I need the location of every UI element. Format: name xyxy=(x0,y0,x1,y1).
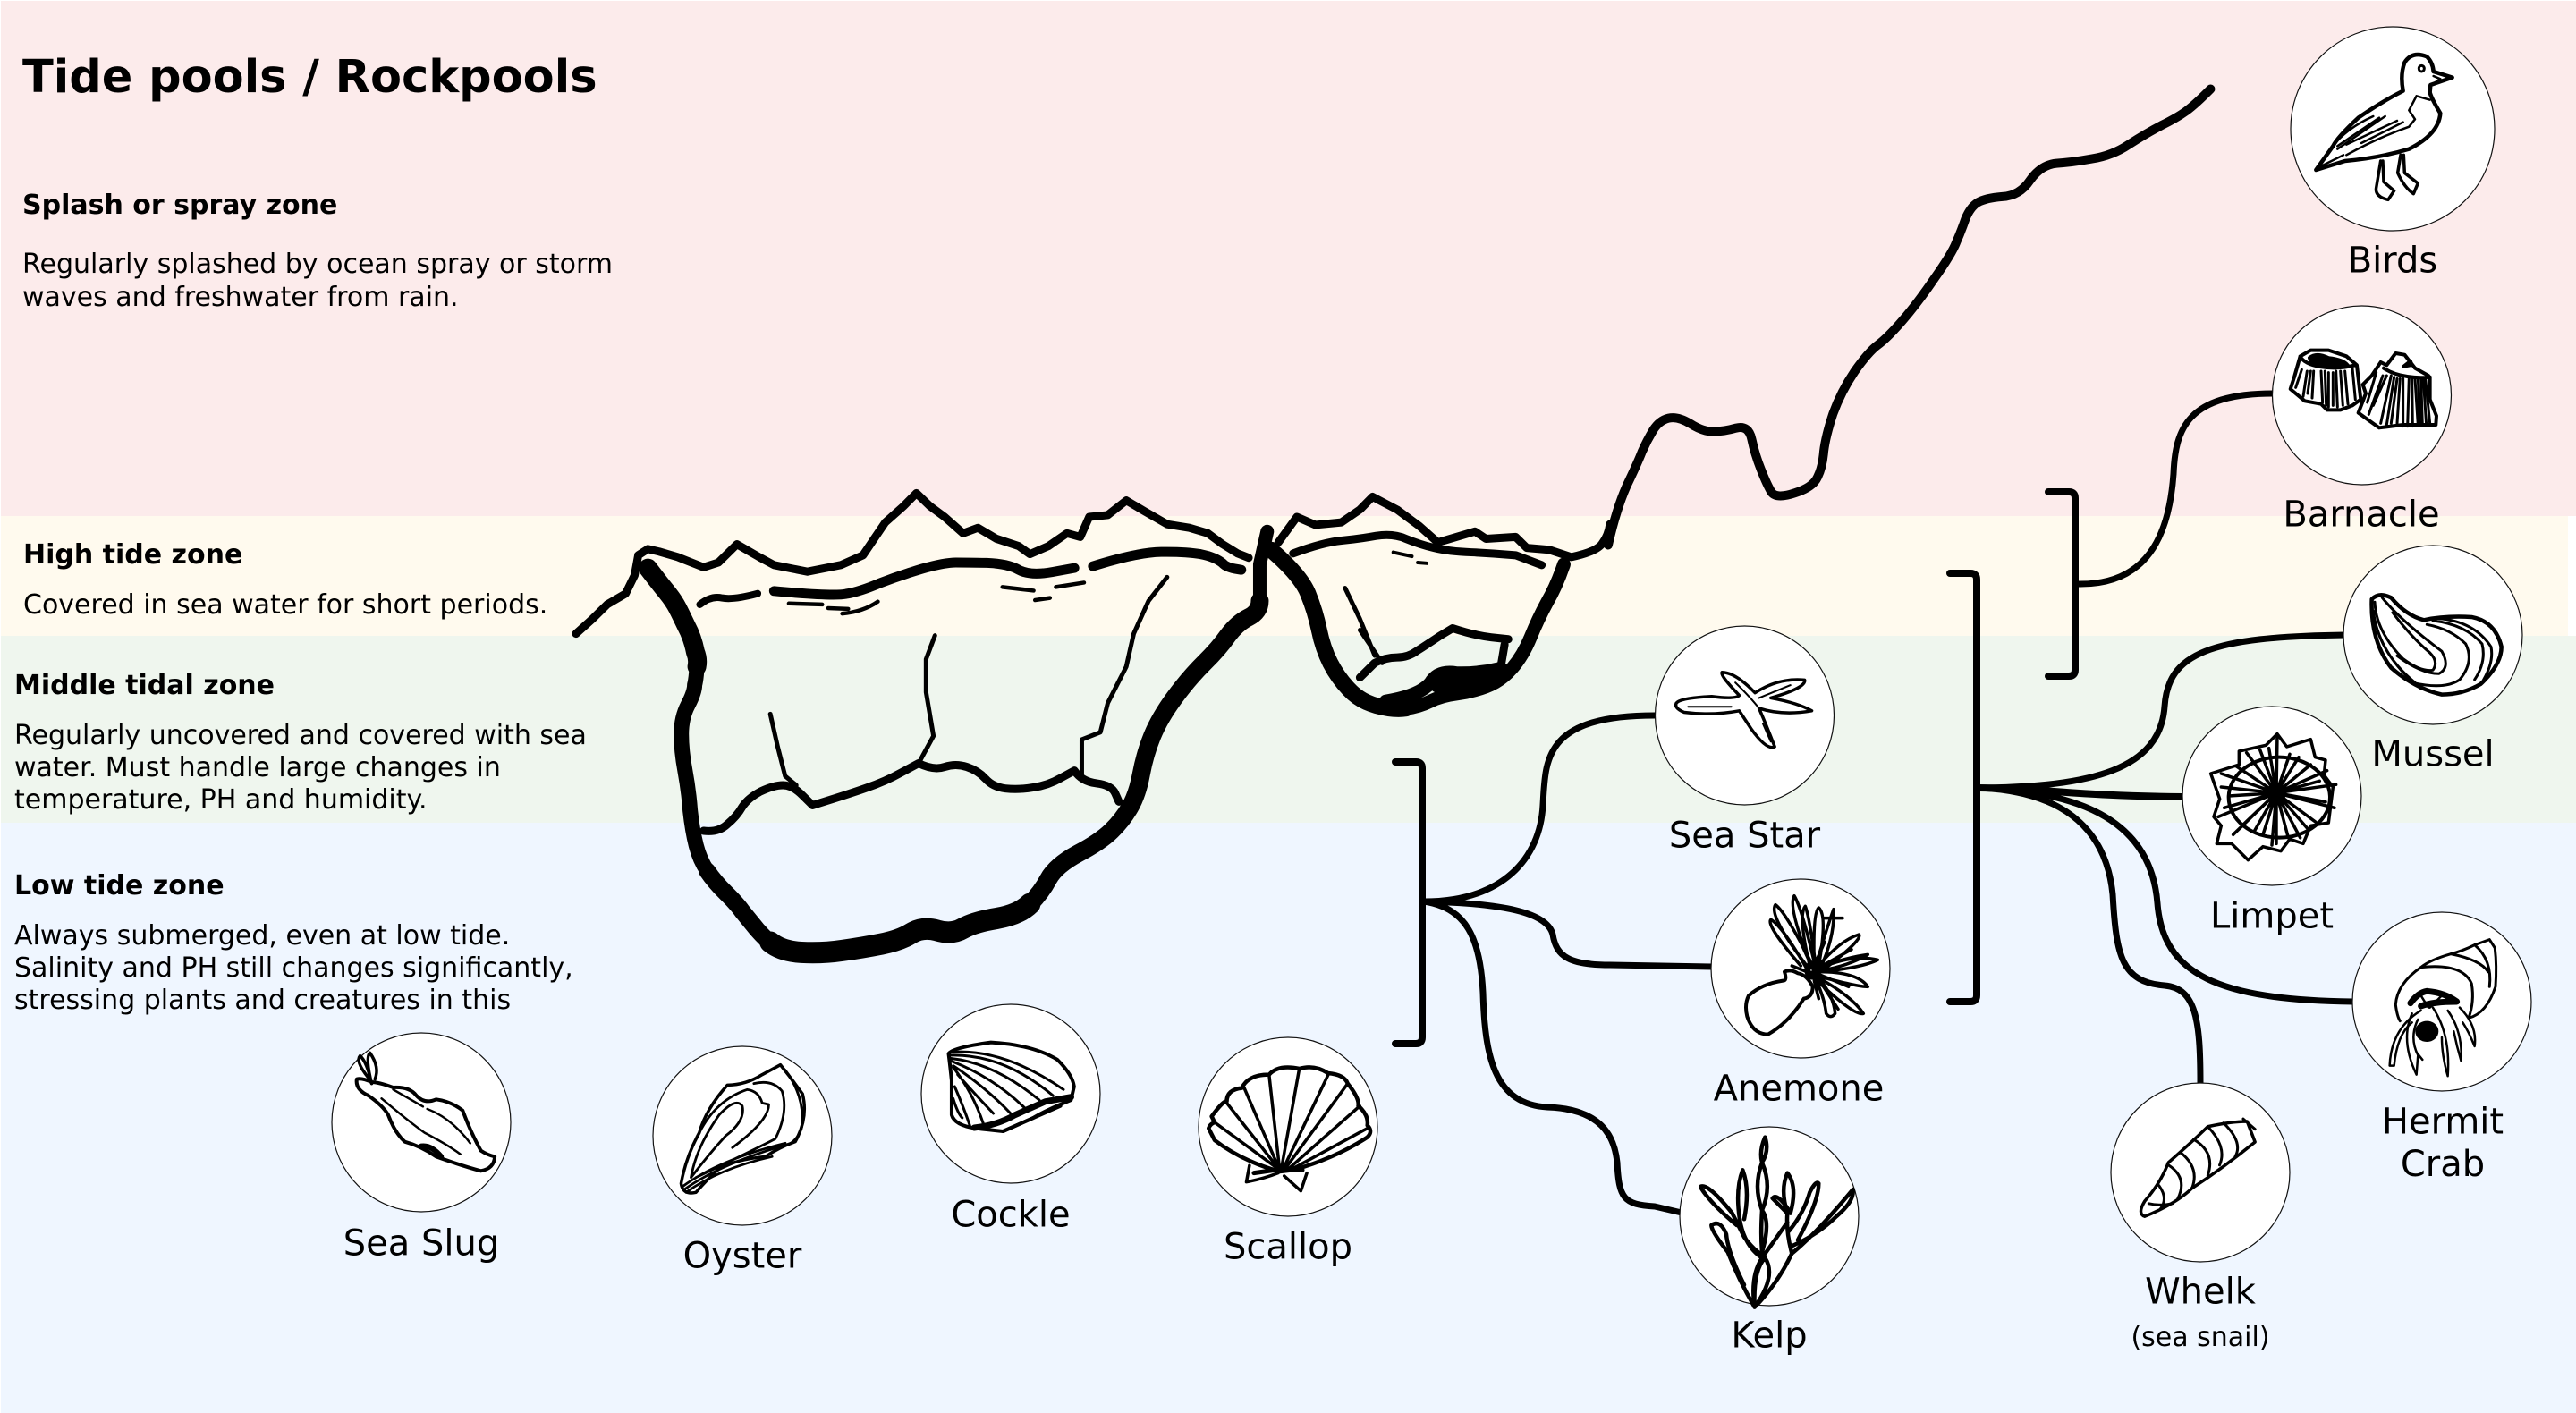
label: mussel: Mussel xyxy=(2371,733,2495,774)
rocky shoreline line xyxy=(1608,89,2210,545)
pool right wall xyxy=(1030,601,1259,904)
branch to hermit crab xyxy=(1979,788,2352,1002)
text block: middle tidal zone: temperature, PH and humidity. xyxy=(14,784,428,816)
pool floor left xyxy=(708,871,774,946)
branch to anemone xyxy=(1424,901,1712,967)
text block: splash zone xyxy=(22,190,613,313)
label: hermit crab: Crab xyxy=(2401,1144,2485,1185)
icon: scallop xyxy=(1199,1037,1377,1216)
text block: low tide zone: Always submerged, even at low tide. xyxy=(14,920,510,952)
left wall lower xyxy=(682,666,708,871)
text block: splash zone: Splash or spray zone xyxy=(22,190,337,221)
connector tree: low group xyxy=(1395,715,1712,1213)
text block: low tide zone: stressing plants and creatures in this xyxy=(14,985,511,1016)
text block: low tide zone: Salinity and PH still changes significantly, xyxy=(14,952,573,984)
second pool right wall xyxy=(1406,564,1563,708)
icon: barnacle xyxy=(2272,306,2451,485)
text block: low tide zone: Low tide zone xyxy=(14,870,225,901)
bracket xyxy=(1395,762,1422,1044)
icon: mussel xyxy=(2343,546,2522,724)
connector tree: middle group xyxy=(1950,573,2352,1083)
text block: splash zone: Regularly splashed by ocean spray or storm xyxy=(22,249,613,280)
bracket xyxy=(2048,492,2075,676)
label: birds: Birds xyxy=(2348,240,2437,281)
label: sea star: Sea Star xyxy=(1669,816,1821,857)
icon: whelk xyxy=(2111,1083,2290,1262)
left shore and upper ridge xyxy=(576,493,1249,634)
icon: oyster xyxy=(653,1046,832,1225)
icon: birds xyxy=(2291,27,2495,231)
branch to kelp xyxy=(1424,901,1682,1213)
inner ledge xyxy=(704,764,1119,831)
panel: middle tidal zone band xyxy=(1,636,2576,823)
second pool inner floor xyxy=(1385,668,1501,701)
water dashes xyxy=(789,582,1084,613)
branch to limpet xyxy=(1979,788,2182,797)
connector tree: top group xyxy=(2048,393,2273,676)
label: cockle: Cockle xyxy=(951,1195,1071,1236)
icon: anemone xyxy=(1711,879,1890,1058)
title: Tide pools / Rockpools xyxy=(22,51,597,104)
text block: high tide zone: Covered in sea water for short periods. xyxy=(23,589,547,621)
icon: hermit crab xyxy=(2352,912,2531,1091)
text block: high tide zone: High tide zone xyxy=(23,539,242,571)
second pool cracks xyxy=(1345,588,1382,663)
label: hermit crab: Hermit xyxy=(2382,1102,2504,1143)
branch to sea star xyxy=(1424,715,1655,901)
bracket xyxy=(1950,573,1977,1002)
branch to whelk xyxy=(1979,788,2200,1083)
panel: low tide zone band xyxy=(1,823,2576,1413)
branch to mussel xyxy=(1979,635,2345,788)
label: anemone: Anemone xyxy=(1714,1068,1884,1109)
label: whelk: (sea snail) xyxy=(2131,1322,2270,1353)
icon: sea star xyxy=(1655,626,1834,805)
branch to barnacle xyxy=(2077,393,2273,584)
icon: limpet xyxy=(2182,706,2361,885)
label: whelk: Whelk xyxy=(2145,1272,2257,1313)
water line left fragment xyxy=(699,594,758,605)
pool floor bottom xyxy=(770,904,1030,952)
second pool inner ledge xyxy=(1360,628,1508,678)
text block: high tide zone xyxy=(23,539,547,621)
text block: middle tidal zone: Regularly uncovered and covered with sea xyxy=(14,720,587,751)
label: sea slug: Sea Slug xyxy=(343,1223,499,1265)
label: oyster: Oyster xyxy=(683,1236,802,1277)
panel: splash zone band xyxy=(1,1,2576,516)
second pool dashes xyxy=(1394,553,1427,563)
text block: middle tidal zone: water. Must handle large changes in xyxy=(14,752,501,783)
label: scallop: Scallop xyxy=(1224,1227,1352,1268)
label: barnacle: Barnacle xyxy=(2283,494,2440,535)
text block: low tide zone xyxy=(14,870,573,1016)
rock pool drawing xyxy=(576,493,1610,952)
second pool ridge xyxy=(1278,497,1610,557)
text block: middle tidal zone: Middle tidal zone xyxy=(14,670,275,701)
panel: high tide zone band xyxy=(1,516,2568,636)
second pool water line xyxy=(1293,535,1542,565)
icon: sea slug xyxy=(332,1033,511,1212)
label: limpet: Limpet xyxy=(2210,896,2334,937)
text block: splash zone: waves and freshwater from rain. xyxy=(22,282,459,313)
central pillar xyxy=(1259,531,1267,601)
cracks xyxy=(770,577,1167,785)
icon: kelp xyxy=(1680,1127,1859,1307)
text block: middle tidal zone xyxy=(14,670,587,816)
left wall upper xyxy=(648,568,698,666)
icon: cockle xyxy=(921,1004,1100,1183)
upper water line xyxy=(774,552,1241,595)
label: whelk xyxy=(2131,1272,2270,1353)
label: kelp: Kelp xyxy=(1731,1315,1808,1356)
second pool left wall xyxy=(1271,550,1406,709)
second pool floor fill xyxy=(1437,677,1497,685)
